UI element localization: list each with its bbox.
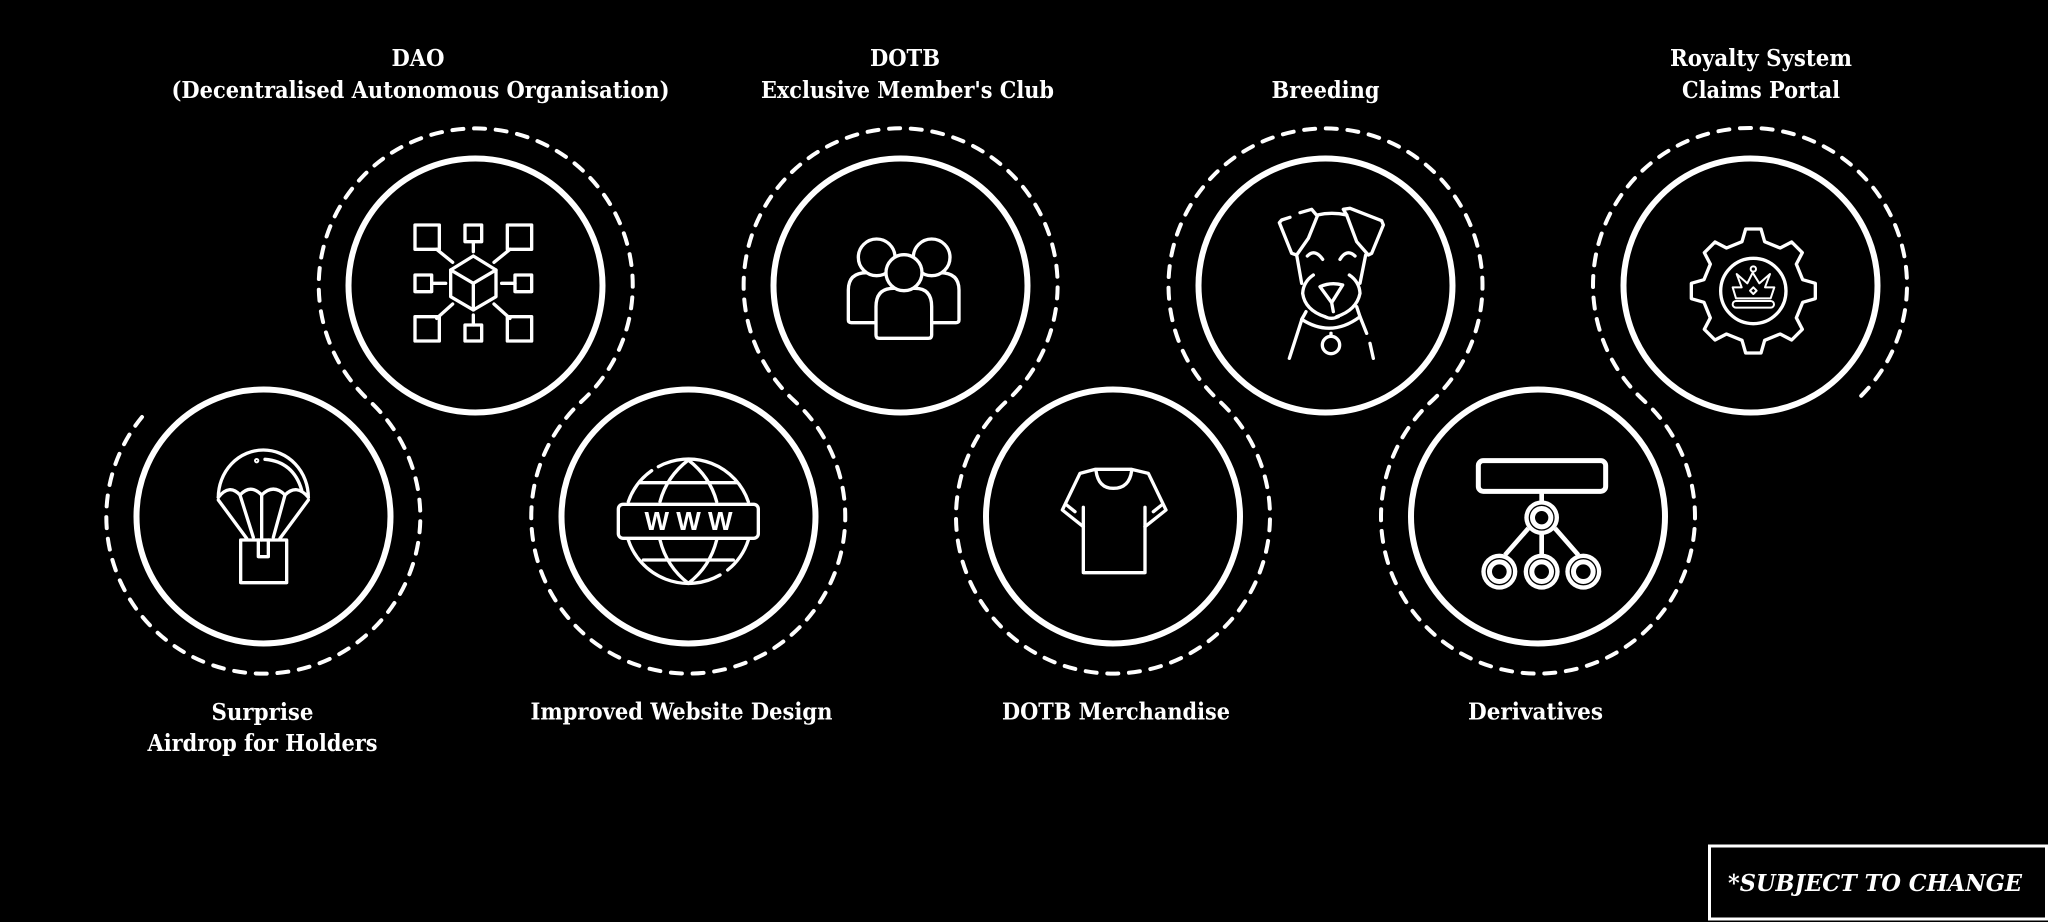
ring — [136, 390, 390, 644]
icon: network cube — [415, 225, 532, 341]
icon: t-shirt — [1062, 469, 1166, 573]
panel: royalty system — [1624, 45, 1878, 412]
icon: derivative tree — [1478, 461, 1606, 590]
icon: dog head — [1279, 208, 1383, 358]
panel: surprise airdrop — [136, 390, 390, 757]
dashed timeline path — [106, 128, 1907, 674]
label: DOTB Merchandise — [1002, 698, 1230, 726]
callout: subject to change: *SUBJECT TO CHANGE — [1728, 870, 2022, 897]
ring — [348, 158, 602, 412]
label: Exclusive Member's Club — [761, 77, 1054, 104]
label — [147, 699, 378, 757]
callout: subject to change — [1710, 846, 2046, 919]
label: Airdrop for Holders — [147, 730, 378, 757]
label — [761, 45, 1054, 104]
panel: breeding — [1198, 77, 1452, 412]
ring — [774, 158, 1028, 412]
label: DAO — [392, 45, 444, 72]
label: DOTB — [870, 45, 940, 72]
panel: derivatives — [1411, 390, 1665, 726]
icon: group of people — [848, 239, 959, 338]
label — [172, 45, 670, 104]
ring — [562, 390, 816, 644]
label: Royalty System — [1670, 45, 1852, 72]
ring — [1624, 158, 1878, 412]
icon text: www: WWW — [644, 506, 733, 536]
label: Claims Portal — [1682, 77, 1840, 104]
panel: merchandise — [986, 390, 1240, 726]
label: Derivatives — [1468, 698, 1603, 726]
ring — [1198, 158, 1452, 412]
panel: members club — [761, 45, 1054, 412]
ring — [1411, 390, 1665, 644]
icon: gear with crown — [1691, 229, 1815, 353]
panel: DAO — [172, 45, 670, 412]
label: (Decentralised Autonomous Organisation) — [172, 77, 670, 104]
label: Improved Website Design — [530, 698, 833, 726]
panel: website design — [530, 390, 833, 726]
label: Breeding — [1272, 77, 1380, 104]
icon: parachute with box — [218, 450, 308, 583]
ring — [986, 390, 1240, 644]
label: Surprise — [212, 699, 314, 726]
icon: globe www — [618, 459, 758, 583]
label — [1670, 45, 1852, 104]
